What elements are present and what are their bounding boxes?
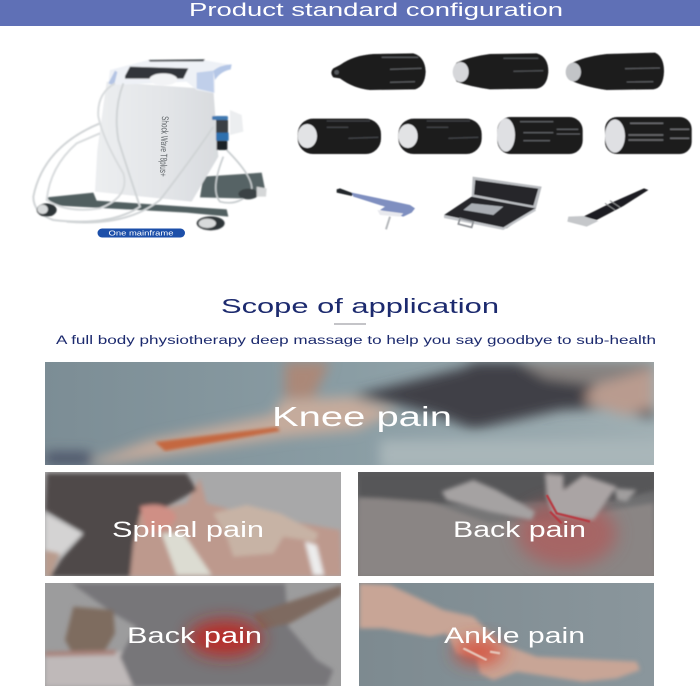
panel title: Back pain — [453, 517, 586, 542]
section heading: scope of application: Scope of application — [221, 296, 499, 318]
panel: ankle pain — [359, 583, 654, 686]
panel: back pain top — [358, 472, 655, 577]
panel title: Knee pain — [272, 401, 452, 432]
accessories: transmitters and case — [298, 53, 692, 230]
panel: spinal pain — [45, 472, 342, 577]
capsule row 1 item 2 — [453, 53, 548, 89]
carrying case — [444, 177, 542, 230]
capsule row 1 item 3 — [566, 53, 664, 90]
label pill: one mainframe: One mainframe — [108, 230, 174, 237]
panel title: Spinal pain — [112, 517, 264, 542]
header banner: Product standard configuration — [189, 0, 563, 20]
subtitle: A full body physiotherapy deep massage to help you say goodbye to sub-health — [56, 335, 656, 347]
panel: back pain bottom — [45, 583, 342, 687]
header banner — [0, 0, 700, 26]
capsule row 1 item 1 — [331, 53, 426, 90]
machine label text: Shock Wave T8plus+ — [157, 116, 170, 177]
handpiece — [337, 188, 415, 229]
capsule row 2 item 3 — [497, 117, 583, 154]
heading underline — [334, 324, 366, 325]
capsule row 2 item 2 — [398, 119, 482, 154]
capsule row 2 item 4 — [605, 117, 692, 154]
machine: shock wave mainframe — [33, 59, 267, 230]
panel title: Back pain — [127, 623, 262, 648]
panel title: Ankle pain — [444, 623, 585, 648]
capsule row 2 item 1 — [298, 119, 381, 154]
label pill: one mainframe — [98, 228, 185, 238]
panel: knee pain — [45, 362, 664, 470]
wand applicator — [567, 188, 648, 227]
